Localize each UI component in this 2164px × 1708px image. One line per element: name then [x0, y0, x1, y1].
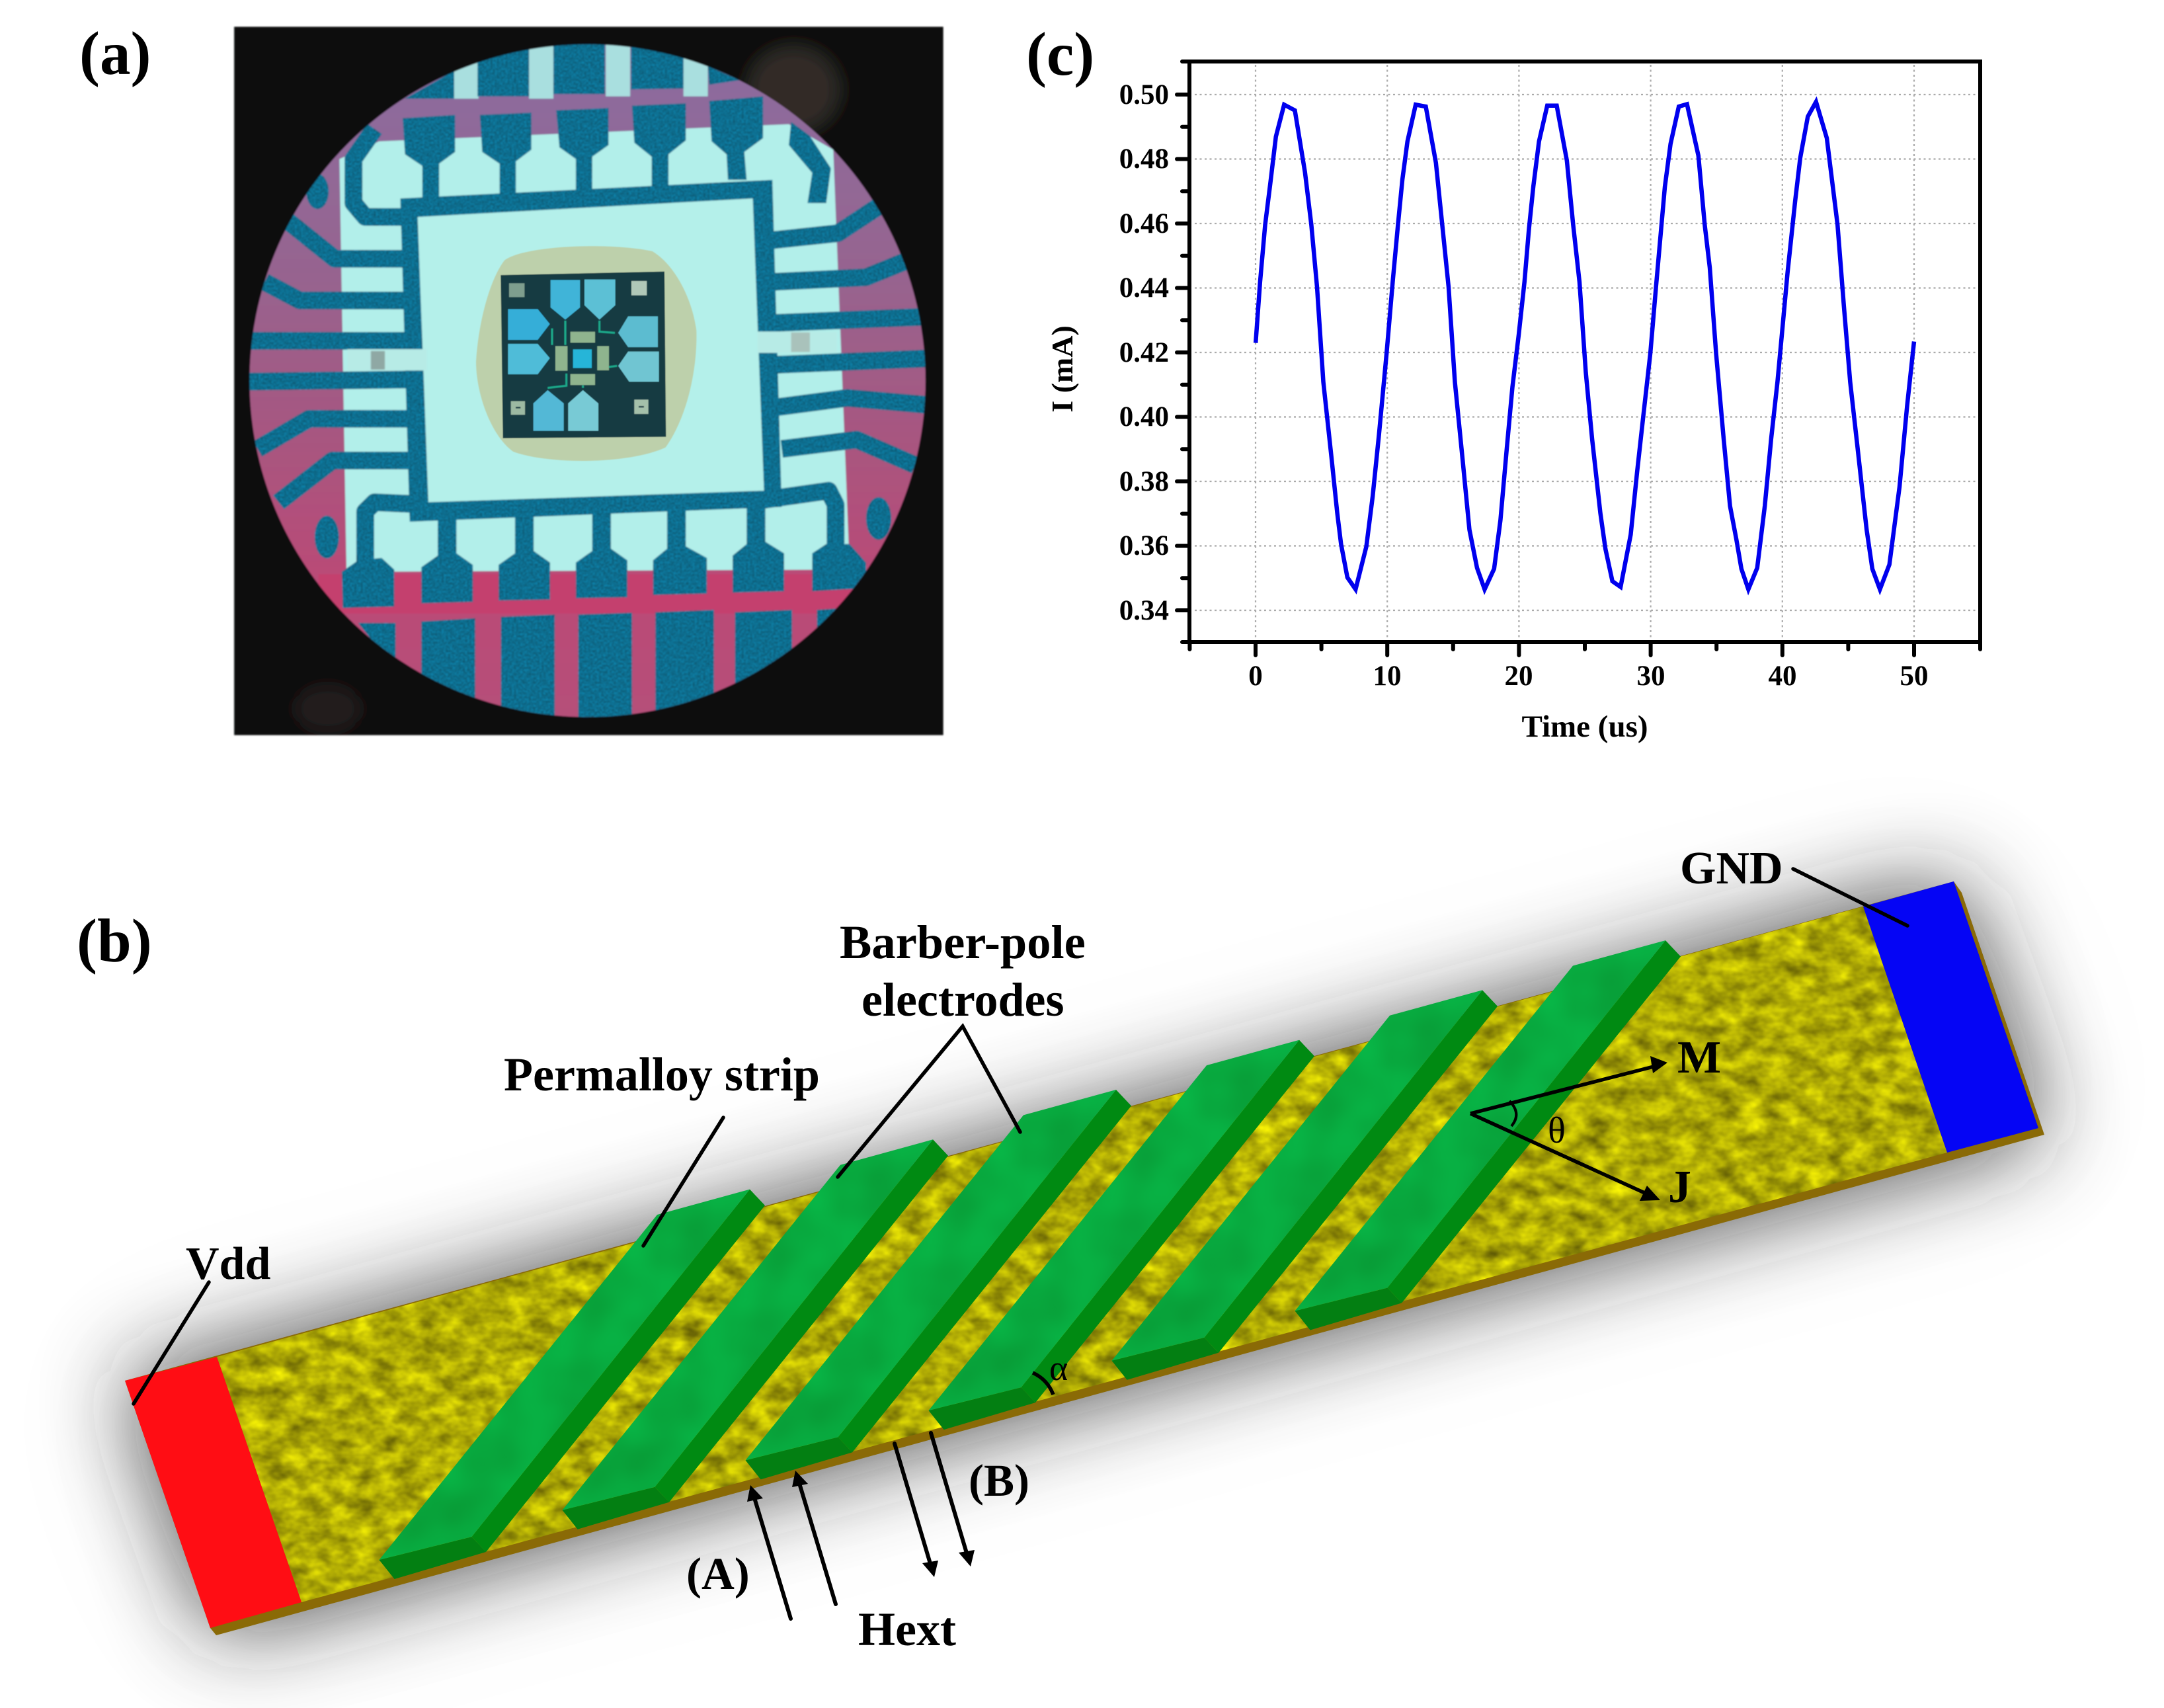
strip side thickness: [125, 881, 2044, 1635]
label: Vdd with leader: Vdd: [186, 1239, 270, 1289]
barber-pole electrode 1: [380, 1190, 765, 1579]
substrate: [243, 38, 936, 725]
panel (a): microscope photo of packaged sensor chip: [234, 27, 943, 737]
teal copper traces: [248, 43, 927, 720]
die body: [501, 272, 666, 438]
angle theta: [1509, 1101, 1566, 1151]
panel label (a): (a): [79, 20, 151, 88]
vector M arrow and label: [1470, 1032, 1721, 1114]
x axis tick labels: 20: [1505, 661, 1533, 692]
label: (B): (B): [969, 1455, 1029, 1506]
bond pads: [508, 280, 659, 431]
label: Permalloy strip with leader: Permalloy strip: [504, 1048, 820, 1101]
x axis tick labels: 30: [1637, 661, 1665, 692]
axes frame and ticks: [1177, 61, 1980, 655]
label: Vdd with leader: [134, 1239, 270, 1404]
photo dark background: [234, 27, 943, 735]
panel (b): 3D permalloy strip with barber-pole electrodes: [99, 860, 2069, 1660]
alignment marks and logo: [509, 281, 649, 415]
y axis tick labels: [1119, 79, 1169, 626]
y axis tick labels: 0.38: [1119, 466, 1169, 497]
current waveform: [1256, 102, 1914, 589]
left gap with bond device: [347, 349, 427, 370]
angle theta: θ: [1548, 1110, 1566, 1151]
Vdd contact (red): [125, 1357, 301, 1628]
lens field of view: [243, 38, 936, 725]
red solder band: [319, 574, 880, 614]
y axis tick labels: 0.48: [1119, 143, 1169, 175]
x axis tick labels: 0: [1248, 661, 1263, 692]
GND contact (blue): [1863, 881, 2038, 1153]
panel label (b): (b): [77, 907, 152, 975]
y axis tick labels: 0.34: [1119, 595, 1169, 626]
vector J arrow and label: J: [1668, 1162, 1691, 1213]
label: GND with leader: GND: [1680, 843, 1783, 894]
panel label (c): (c): [1026, 20, 1094, 89]
label: Barber-pole electrodes with leaders: [838, 915, 1086, 1177]
adhesive patch: [476, 246, 696, 461]
x axis tick labels: 50: [1900, 661, 1928, 692]
grid: [1195, 65, 1977, 640]
x axis title: Time (us): [1521, 710, 1648, 744]
right gap with bond device: [758, 331, 837, 353]
barber-pole electrode 5: [1112, 990, 1498, 1380]
y axis tick labels: 0.36: [1119, 530, 1169, 561]
y axis tick labels: 0.44: [1119, 272, 1169, 304]
label: Permalloy strip with leader: [504, 1048, 820, 1246]
y axis tick labels: 0.40: [1119, 401, 1169, 432]
x axis tick labels: [1248, 661, 1928, 692]
die attach pad: [418, 198, 764, 503]
y axis title: I (mA): [1045, 325, 1079, 413]
drop shadow: [99, 860, 2069, 1660]
Hext arrows group B (pointing down): [895, 1433, 975, 1577]
barber-pole electrode 2: [562, 1139, 948, 1529]
Hext arrows group A (pointing up): [747, 1471, 836, 1619]
label: Barber-pole electrodes with leaders: Barber-pole: [840, 915, 1086, 969]
x axis tick labels: 10: [1373, 661, 1402, 692]
vector M arrow and label: M: [1677, 1032, 1721, 1083]
label: Barber-pole electrodes with leaders: electrodes: [862, 973, 1064, 1026]
angle alpha: [1033, 1348, 1068, 1395]
label: GND with leader: [1680, 843, 1907, 926]
y axis tick labels: 0.50: [1119, 79, 1169, 110]
barber-pole electrode 4: [928, 1040, 1314, 1430]
label: (A): (A): [686, 1549, 750, 1599]
y axis tick labels: 0.42: [1119, 337, 1169, 368]
top row pale fingers: [454, 43, 708, 99]
barber-pole electrode 6: [1295, 940, 1681, 1330]
x axis tick labels: 40: [1768, 661, 1797, 692]
label: Hext: Hext: [858, 1603, 956, 1656]
pale metal area: [339, 124, 850, 572]
out-of-focus glare bottom left: [290, 681, 365, 737]
permalloy film: [217, 907, 1947, 1602]
angle alpha: α: [1049, 1348, 1068, 1388]
sensor die with adhesive: [476, 246, 696, 461]
panel (c): current vs time line chart: [1045, 61, 1980, 744]
out-of-focus glare top right: [744, 43, 842, 136]
y axis tick labels: 0.46: [1119, 208, 1169, 239]
Wheatstone bridge centre: [547, 321, 617, 388]
vector J arrow and label: [1470, 1114, 1691, 1213]
barber-pole electrode 3: [746, 1090, 1131, 1479]
